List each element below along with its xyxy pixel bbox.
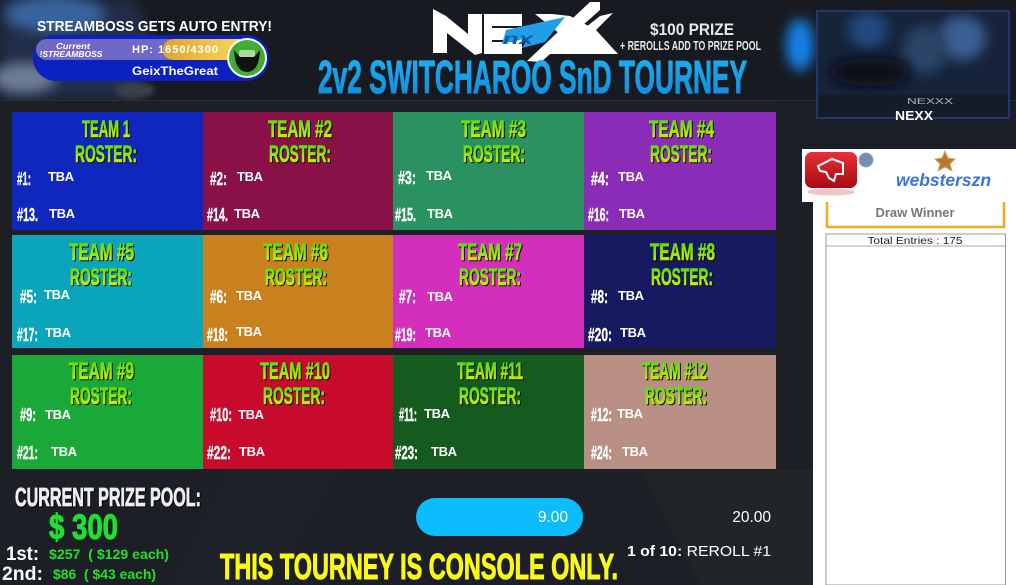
first place prize: $257 ( $129 each)	[49, 546, 169, 562]
draw winner button: Draw Winner	[876, 206, 955, 220]
panel: team 11: #11:	[399, 405, 417, 425]
panel: team 4: #16:	[588, 205, 609, 225]
first place prize: 1st:	[6, 544, 39, 565]
second place prize: $86 ( $43 each)	[53, 566, 156, 582]
panel: team 7: TEAM #7	[458, 239, 522, 266]
panel: team 6: #6:	[210, 287, 227, 307]
panel: team 11: ROSTER:	[459, 383, 521, 410]
streamboss widget: HP: 1650/4300	[132, 44, 218, 56]
panel: team 4	[584, 112, 776, 230]
entries list: Total Entries : 175	[868, 235, 963, 247]
panel: team 6: TEAM #6	[263, 239, 328, 266]
panel: team 10: TBA	[239, 444, 266, 459]
streamboss widget: !STREAMBOSS	[40, 50, 103, 59]
panel: team 7: #19:	[395, 325, 416, 345]
panel: team 7: ROSTER:	[459, 264, 521, 291]
header photo: right with webcam frame	[786, 11, 1009, 123]
streamboss widget: GeixTheGreat	[132, 66, 218, 78]
header photo: left	[0, 0, 155, 100]
panel: team 12: TEAM #12	[642, 358, 707, 385]
prize pool heading: CURRENT PRIZE POOL:	[15, 482, 201, 512]
second place prize: 2nd:	[2, 564, 43, 585]
header photo: right with webcam frame: NEXXX	[907, 97, 954, 106]
panel: team 5: TBA	[44, 287, 71, 302]
panel: team 1	[12, 112, 203, 230]
panel: team 7: TBA	[427, 289, 454, 304]
streamboss widget: Current	[56, 42, 90, 51]
panel: team 3: TBA	[426, 168, 453, 183]
panel: team 4: TEAM #4	[649, 116, 714, 143]
panel: team 5: TBA	[45, 325, 72, 340]
winner name: websterszn	[896, 170, 991, 190]
panel: team 8	[584, 235, 776, 348]
panel: team 1: #1:	[17, 169, 31, 189]
panel: team 11: TBA	[431, 444, 458, 459]
panel: team 5: ROSTER:	[70, 264, 132, 291]
panel: team 3: TEAM #3	[461, 116, 526, 143]
panel: team 1: #13.	[17, 205, 38, 225]
panel: team 12	[584, 355, 776, 469]
panel: team 11: TBA	[424, 406, 451, 421]
panel: team 5: #17:	[17, 325, 38, 345]
panel: team 11: #23:	[395, 443, 418, 463]
panel: team 9: ROSTER:	[70, 383, 132, 410]
panel: team 2: TBA	[234, 206, 261, 221]
progress bar	[416, 498, 583, 536]
panel: team 6	[203, 235, 393, 348]
prize note: + REROLLS ADD TO PRIZE POOL	[620, 39, 761, 53]
panel: team 11: TEAM #11	[457, 358, 523, 385]
panel: team 2: ROSTER:	[269, 141, 331, 168]
streamboss widget	[33, 35, 269, 81]
panel: team 9	[12, 355, 203, 469]
panel: team 9: #21:	[17, 443, 38, 463]
panel: team 3: TBA	[427, 206, 454, 221]
panel: team 2: TEAM #2	[268, 116, 332, 143]
logo	[433, 2, 618, 62]
icon: star	[935, 151, 955, 171]
panel: team 3: ROSTER:	[463, 141, 525, 168]
panel: team 8: TBA	[620, 325, 647, 340]
panel: team 7: #7:	[399, 287, 416, 307]
panel: team 9: TEAM #9	[69, 358, 134, 385]
panel: team 1: TEAM 1	[82, 116, 130, 143]
panel: team 12: TBA	[622, 444, 649, 459]
panel: team 8: TEAM #8	[650, 239, 715, 266]
panel: team 4: TBA	[619, 206, 646, 221]
panel: team 8: #8:	[591, 287, 608, 307]
panel: team 3: #15.	[395, 205, 416, 225]
panel: team 1: TBA	[49, 206, 76, 221]
panel: team 6: ROSTER:	[265, 264, 327, 291]
panel: team 10: #10:	[210, 405, 232, 425]
progress bar: 9.00	[538, 509, 568, 526]
entries list	[826, 234, 1006, 585]
icon: streamer avatar	[227, 38, 267, 78]
panel: team 4: #4:	[591, 169, 609, 189]
panel: team 7: TBA	[425, 325, 452, 340]
panel: team 4: ROSTER:	[650, 141, 712, 168]
panel: team 10: TEAM #10	[260, 358, 330, 385]
panel: team 5	[12, 235, 203, 348]
panel: team 10: ROSTER:	[263, 383, 325, 410]
prize note	[620, 20, 761, 53]
logo text: nx	[503, 31, 535, 48]
panel: team 2: TBA	[237, 169, 264, 184]
first place prize	[6, 544, 169, 565]
header photo: right with webcam frame: NEXX	[895, 108, 933, 123]
prize pool amount: $ 300	[49, 508, 118, 547]
icon: thumbs down	[805, 152, 857, 196]
panel: team 10: #22:	[207, 443, 231, 463]
panel: team 6: TBA	[236, 288, 263, 303]
progress goal: 20.00	[732, 509, 771, 526]
panel: team 9: TBA	[45, 407, 72, 422]
panel: team 7	[393, 235, 584, 348]
panel: team 8: TBA	[618, 288, 645, 303]
draw winner button	[827, 202, 1004, 227]
panel: team 12: TBA	[617, 406, 644, 421]
team grid	[12, 112, 776, 469]
panel: team 8: #20:	[588, 325, 612, 345]
panel: team 12: #12:	[591, 405, 612, 425]
panel: team 3: #3:	[398, 168, 416, 188]
panel: team 6: #18:	[207, 325, 228, 345]
panel: team 5: #5:	[20, 287, 37, 307]
panel: team 2: #14.	[207, 205, 228, 225]
sidebar giveaway panel	[802, 149, 1016, 585]
panel: team 4: TBA	[618, 169, 645, 184]
panel: team 9: TBA	[51, 444, 78, 459]
panel: team 3	[393, 112, 584, 230]
panel: team 12: ROSTER:	[645, 383, 707, 410]
panel: team 8: ROSTER:	[651, 264, 713, 291]
streamboss heading: STREAMBOSS GETS AUTO ENTRY!	[37, 18, 272, 35]
panel: team 2	[203, 112, 393, 230]
panel: team 10: TBA	[238, 407, 265, 422]
reroll counter: 1 of 10: REROLL #1	[627, 543, 771, 560]
second place prize	[2, 564, 156, 585]
panel: team 1: TBA	[48, 169, 75, 184]
panel: team 5: TEAM #5	[69, 239, 134, 266]
panel: team 11	[393, 355, 584, 469]
panel: team 2: #2:	[210, 169, 227, 189]
panel: team 9: #9:	[20, 405, 36, 425]
panel: team 10	[203, 355, 393, 469]
panel: team 1: ROSTER:	[75, 141, 137, 168]
prize note: $100 PRIZE	[650, 20, 734, 39]
icon: globe badge	[859, 153, 873, 167]
panel: team 6: TBA	[236, 324, 263, 339]
panel: team 12: #24:	[591, 443, 612, 463]
